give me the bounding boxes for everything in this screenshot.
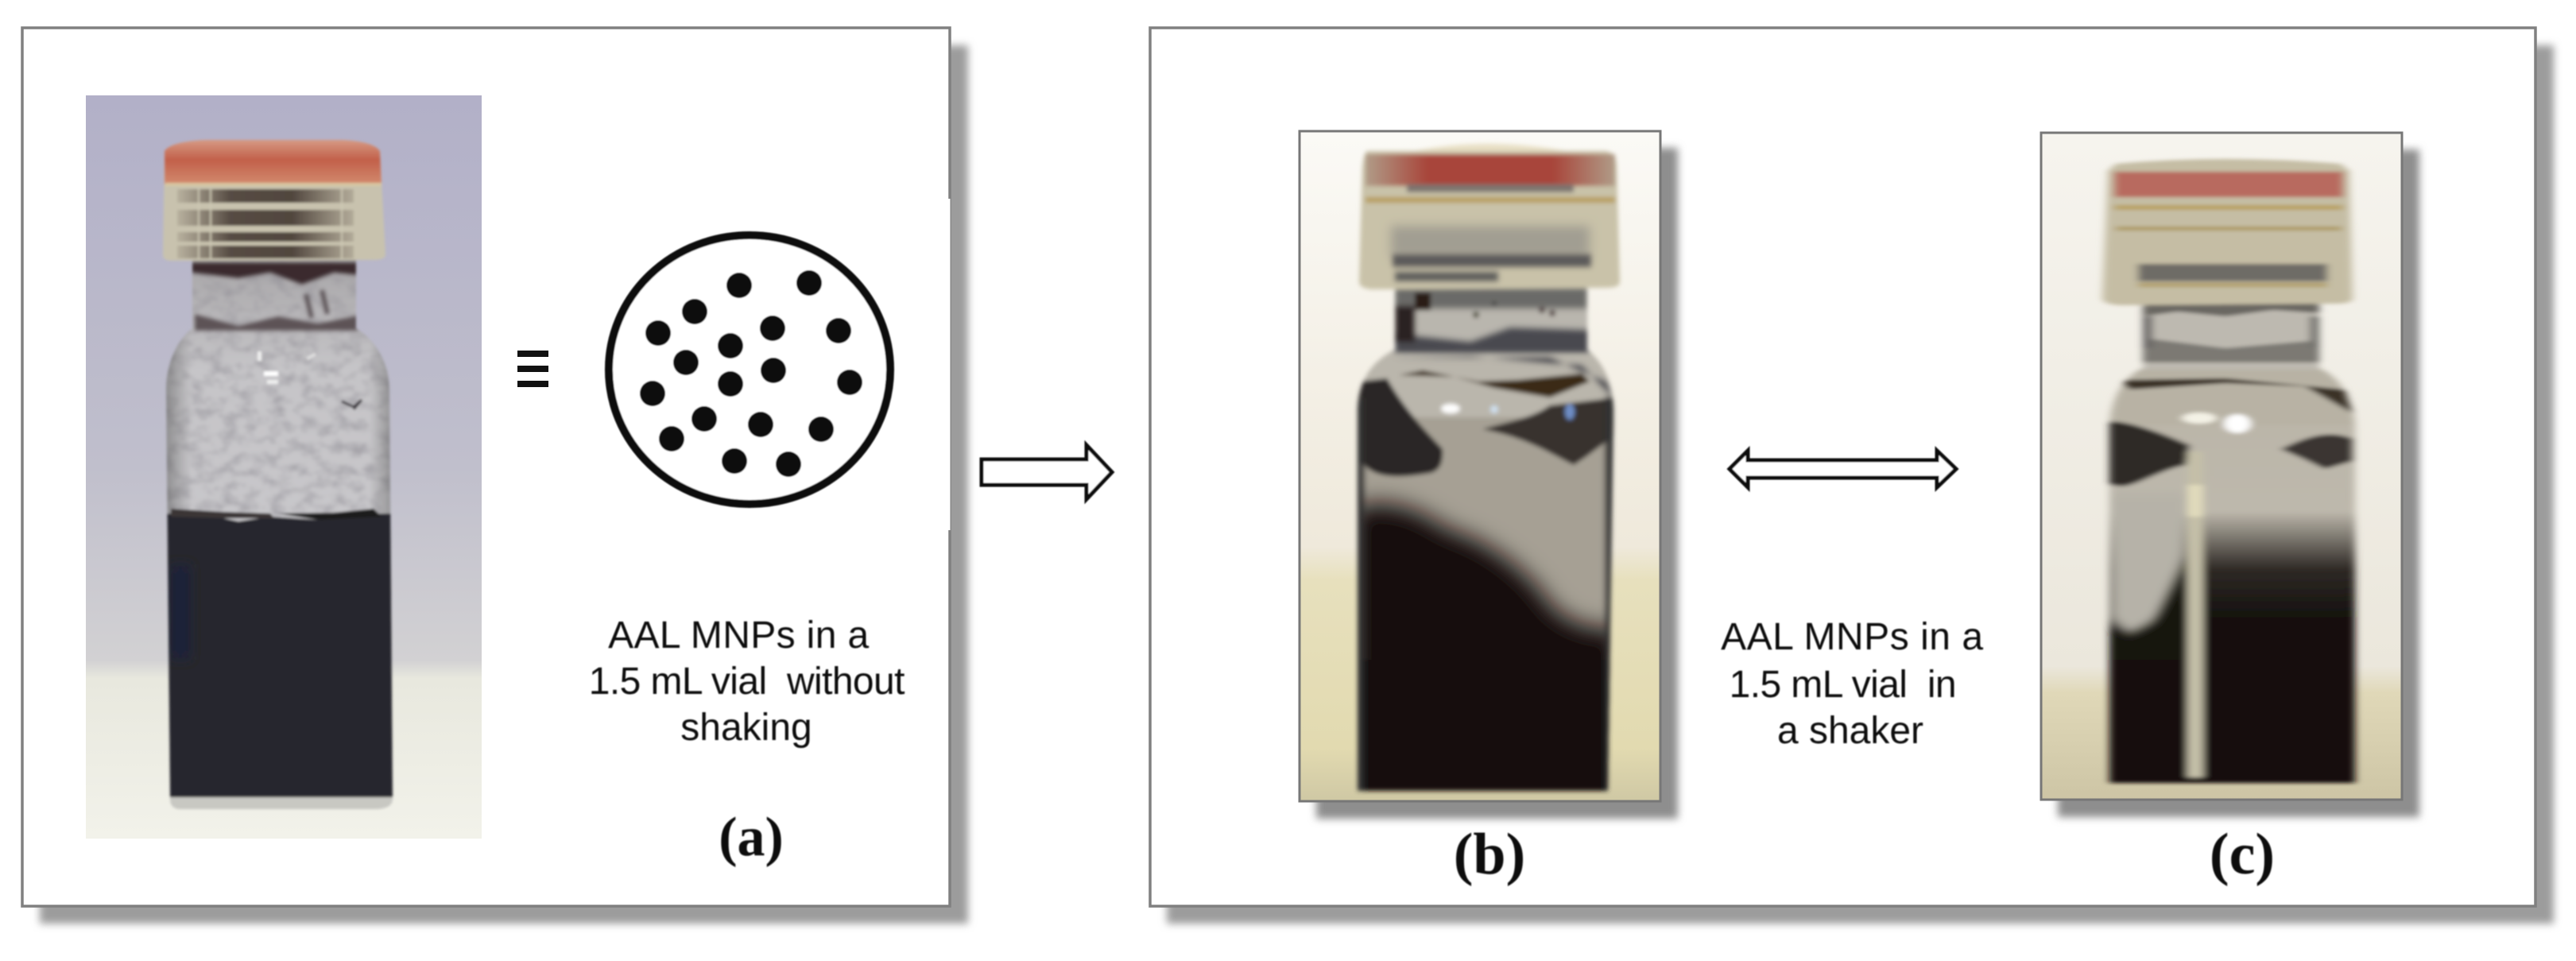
caption: in a shaker: 1.5 mL vial in <box>1730 664 1956 706</box>
caption: in a shaker: a shaker <box>1777 710 1923 752</box>
symbol: equivalent sign <box>517 351 548 387</box>
photo frame: vial during shaking, motion blurred (c) <box>2041 133 2419 817</box>
caption: without shaking: shaking <box>680 707 812 749</box>
schematic: circle with dispersed nanoparticles <box>609 235 890 504</box>
vial cap (b) <box>1359 144 1620 289</box>
double arrow: reversible shaking states <box>1730 451 1956 487</box>
label: (c): (c) <box>2210 822 2275 887</box>
caption: without shaking: AAL MNPs in a <box>608 614 869 657</box>
photo frame: vial during shaking (b) <box>1300 131 1678 819</box>
vial cap (c) <box>2102 159 2353 305</box>
panel: vial without shaking (a) <box>22 28 968 924</box>
vial cap (a) <box>163 140 385 261</box>
arrow: from panel a to panels b and c <box>982 445 1112 499</box>
photo: capped vial with settled AAL MNPs <box>86 95 482 839</box>
label: (a): (a) <box>719 807 784 868</box>
panel: vial in a shaker (b, c) <box>1150 28 2554 924</box>
label: (b): (b) <box>1454 822 1525 887</box>
caption: in a shaker: AAL MNPs in a <box>1721 616 1983 658</box>
caption: without shaking: 1.5 mL vial without <box>589 661 905 703</box>
